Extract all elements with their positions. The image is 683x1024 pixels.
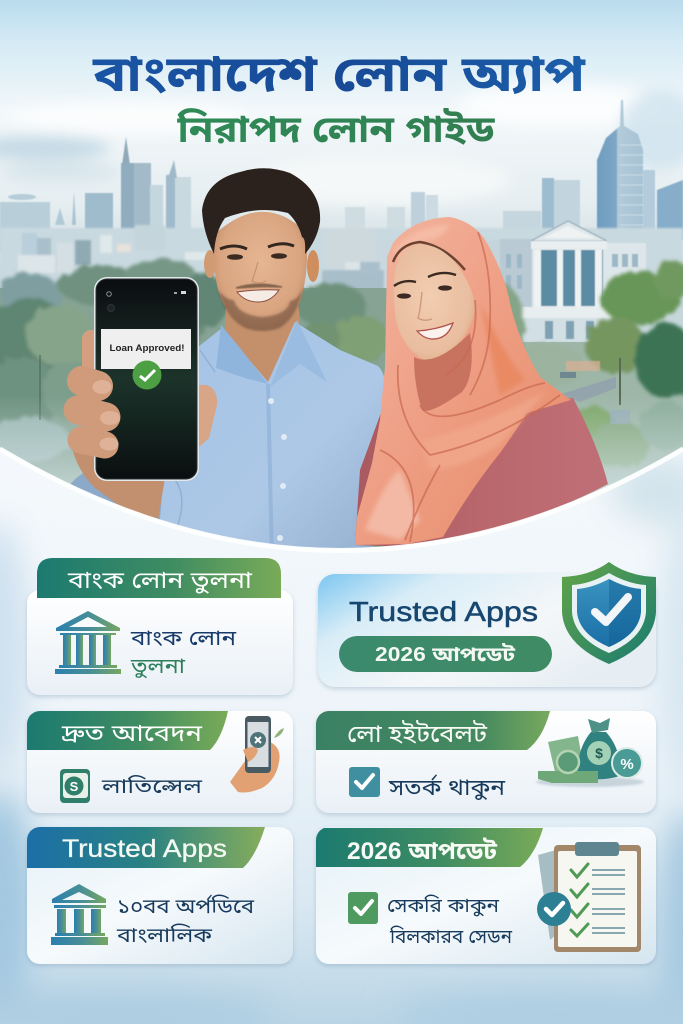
panel body xyxy=(27,711,293,813)
title: বাংলাদেশ লোন অ্যাপ xyxy=(92,46,586,102)
panel body xyxy=(316,827,656,964)
page background xyxy=(0,430,683,1024)
panel text: তুলনা xyxy=(130,655,185,679)
icon: money bag: $ xyxy=(595,745,603,761)
woman smile xyxy=(417,323,453,339)
man xyxy=(66,168,385,560)
man face xyxy=(214,212,307,330)
white arc divider xyxy=(0,449,683,550)
icon: phone in hand xyxy=(230,716,284,792)
tall tower xyxy=(597,100,643,235)
panel heading: লো হইটবেলট xyxy=(347,720,488,748)
panel text: ১০বব অর্পডিবে xyxy=(117,893,255,918)
panel tab xyxy=(27,827,265,868)
man sleeve behind arm xyxy=(70,473,162,520)
hand behind phone xyxy=(70,330,217,520)
man collar and placket xyxy=(172,320,327,560)
loan approved banner xyxy=(101,329,191,369)
panel body xyxy=(27,827,293,964)
panel text xyxy=(387,894,513,948)
phone xyxy=(94,277,199,481)
panel tab xyxy=(37,558,281,598)
clouds xyxy=(0,83,683,205)
update pill xyxy=(339,636,552,672)
panel body xyxy=(318,574,656,687)
woman inner scarf xyxy=(414,333,472,411)
panel text: বিলকারব সেডন xyxy=(389,925,513,948)
fingers xyxy=(78,380,120,450)
man neck xyxy=(224,305,300,382)
panel text: বাংলালিক xyxy=(116,923,213,947)
subtitle: নিরাপদ লোন গাইড xyxy=(176,109,496,150)
panel: trusted apps right xyxy=(318,562,656,687)
icon: money note: S xyxy=(70,779,79,794)
hero scene xyxy=(0,0,683,560)
man eyes and brows xyxy=(220,244,294,283)
tree canopy and ground xyxy=(0,259,683,560)
panel tab xyxy=(316,828,543,867)
panel tab xyxy=(316,711,550,750)
panel text: লাতিল্সেল xyxy=(101,774,202,798)
woman scarf highlights xyxy=(365,225,545,540)
icon: bank xyxy=(55,611,121,674)
icon: money note xyxy=(60,769,90,803)
panel text xyxy=(116,893,255,947)
distant skyline xyxy=(0,137,683,257)
panel body xyxy=(27,590,293,695)
man shirt xyxy=(160,322,385,560)
update pill: 2026 আপডেট xyxy=(375,642,516,666)
panel heading: Trusted Apps xyxy=(62,835,227,863)
panel body xyxy=(316,711,656,813)
woman eyes and brows xyxy=(394,273,456,320)
panel heading: Trusted Apps xyxy=(349,596,538,627)
woman scarf xyxy=(355,217,571,545)
woman face xyxy=(394,244,475,360)
panel text xyxy=(130,627,236,679)
capitol building xyxy=(500,221,646,342)
phone status icons xyxy=(107,291,186,312)
woman dress xyxy=(355,398,608,548)
icon: money bag xyxy=(536,718,644,787)
panel heading: দ্রুত আবেদন xyxy=(61,720,203,746)
mid city haze xyxy=(0,225,683,290)
man mustache xyxy=(236,284,282,288)
bottom haze xyxy=(0,395,683,500)
icon: shield xyxy=(562,562,656,664)
panel heading: বাংক লোন তুলনা xyxy=(67,567,253,594)
woman xyxy=(355,217,608,548)
sky xyxy=(0,0,683,342)
approved check xyxy=(132,360,162,390)
panel: quick apply xyxy=(27,711,293,813)
phone body xyxy=(94,277,199,481)
background tint clouds xyxy=(0,455,683,1024)
panel: 2026 update xyxy=(316,827,656,964)
panel text: সতর্ক থাকুন xyxy=(388,774,506,801)
man beard xyxy=(218,285,304,331)
woman scarf folds xyxy=(380,232,560,542)
panel text: বাংক লোন xyxy=(130,627,236,650)
panel: trusted apps left xyxy=(27,827,293,964)
loan approved banner: Loan Approved! xyxy=(110,343,184,354)
icon: check box xyxy=(349,767,380,797)
woman hair edge xyxy=(393,242,465,270)
man hair xyxy=(202,168,320,254)
icon: check box xyxy=(348,892,378,924)
icon: clipboard xyxy=(537,842,641,952)
man ears xyxy=(204,250,319,282)
panel: low interest xyxy=(316,711,656,813)
icon: money bag: % xyxy=(620,756,634,773)
icon: bank xyxy=(51,884,108,945)
panel tab xyxy=(27,711,228,750)
panel: bank loan compare xyxy=(27,558,293,695)
panel heading: 2026 আপডেট xyxy=(347,837,498,865)
panel text: সেকরি কাকুন xyxy=(387,894,500,917)
man smile xyxy=(237,290,279,302)
